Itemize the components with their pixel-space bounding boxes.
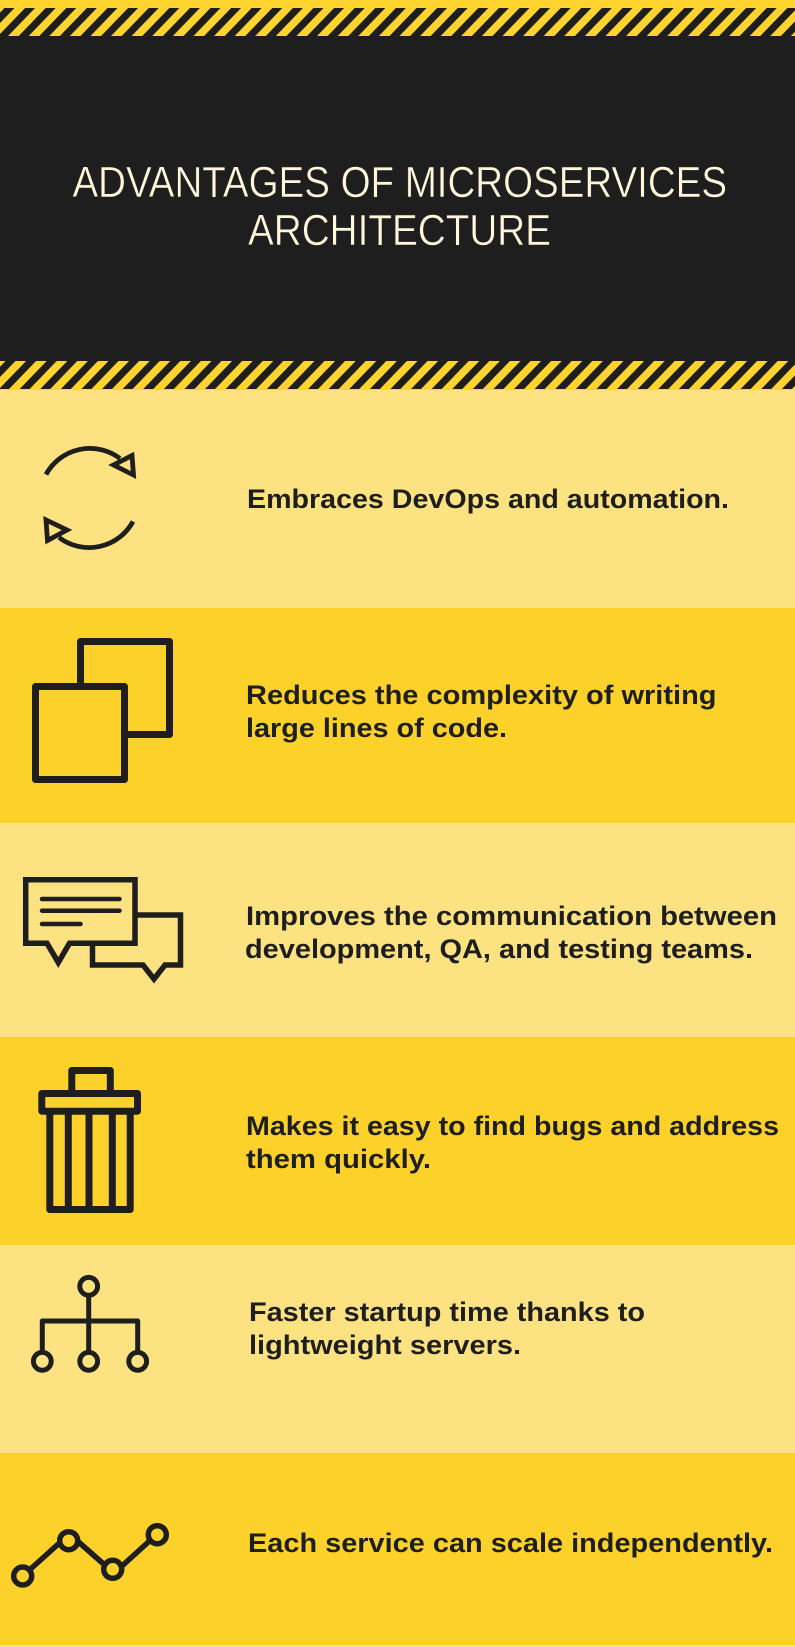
text: communication: development, QA, and testing teams. bbox=[245, 934, 753, 964]
panel: DevOps and automation bbox=[0, 390, 795, 608]
icon: overlapping squares bbox=[36, 642, 170, 780]
icon: trash can bbox=[42, 1070, 137, 1210]
panel: reduces complexity bbox=[0, 608, 795, 823]
bottom hazard stripe band bbox=[0, 361, 795, 389]
text: startup: lightweight servers. bbox=[249, 1330, 521, 1360]
title: ARCHITECTURE bbox=[248, 206, 551, 255]
text: DevOps: Embraces DevOps and automation. bbox=[247, 484, 729, 514]
icon: refresh arrows bbox=[46, 448, 134, 548]
icon: hierarchy tree bbox=[33, 1277, 147, 1370]
icon: line graph bbox=[14, 1526, 166, 1585]
panel: communication bbox=[0, 823, 795, 1037]
text: communication: Improves the communication between bbox=[246, 901, 777, 931]
text: bugs: them quickly. bbox=[246, 1144, 431, 1174]
title bbox=[72, 158, 727, 255]
text: bugs bbox=[246, 1111, 779, 1174]
text: complexity: Reduces the complexity of writing bbox=[246, 680, 716, 710]
text: complexity: large lines of code. bbox=[246, 713, 507, 743]
text: scaling: Each service can scale independently. bbox=[248, 1528, 773, 1558]
text: startup: Faster startup time thanks to bbox=[249, 1297, 645, 1327]
top hazard stripe band bbox=[0, 8, 795, 36]
panel: find bugs bbox=[0, 1037, 795, 1245]
header panel bbox=[0, 0, 795, 390]
panel: faster startup bbox=[0, 1245, 795, 1453]
text: complexity bbox=[246, 680, 716, 743]
icon: speech bubbles bbox=[26, 880, 181, 979]
panel: independent scaling bbox=[0, 1453, 795, 1645]
text: bugs: Makes it easy to find bugs and address bbox=[246, 1111, 779, 1141]
text: communication bbox=[245, 901, 777, 964]
text: startup bbox=[249, 1297, 645, 1360]
